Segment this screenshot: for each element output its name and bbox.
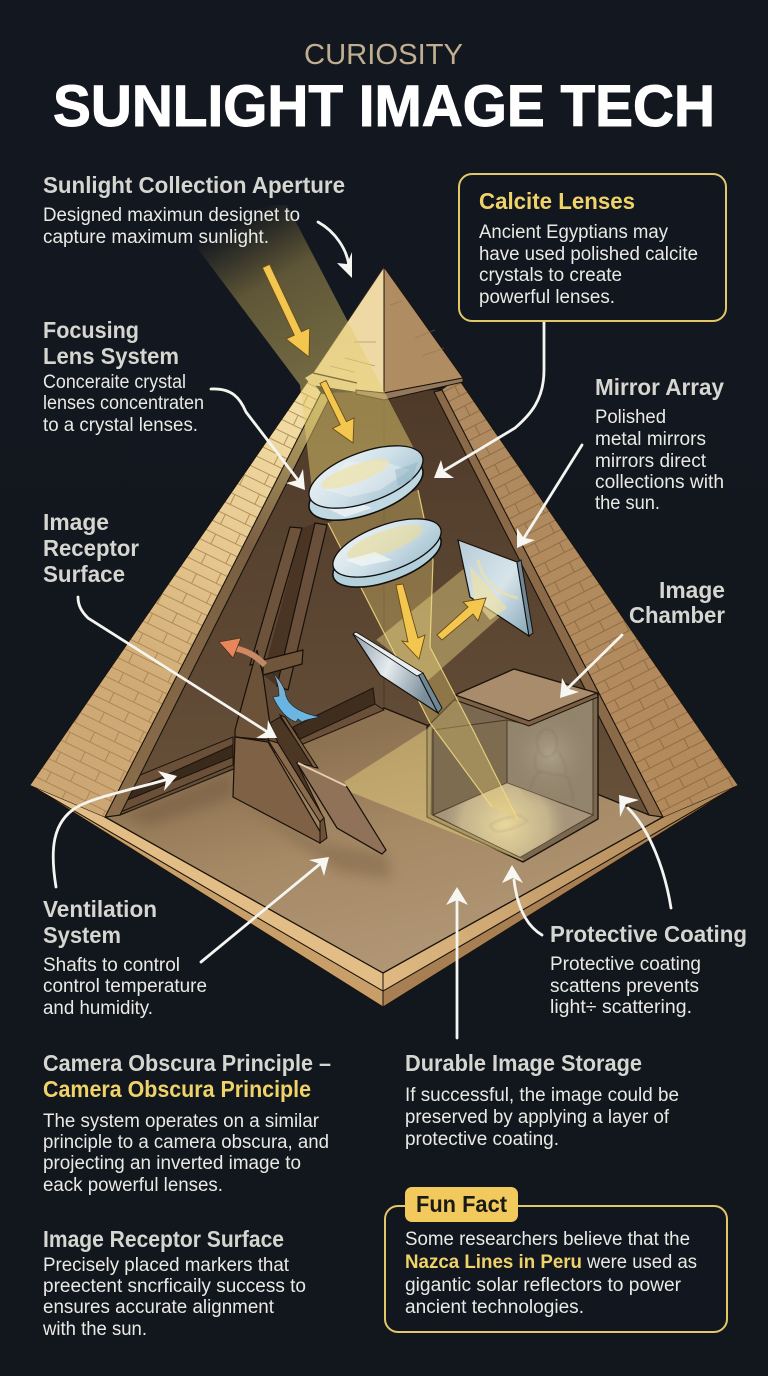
text block: image receptor surface: Image Receptor Surface [43, 1226, 284, 1252]
label: image receptor surface [43, 509, 139, 587]
label: protective coating: Protective coating [550, 954, 701, 975]
upper mirror [458, 540, 533, 636]
label: image receptor surface: Receptor [43, 535, 139, 561]
text block: durable image storage: If successful, the image could be [405, 1085, 679, 1106]
lens 2 [326, 507, 448, 599]
title: SUNLIGHT IMAGE TECH [53, 74, 715, 139]
label: protective coating: Protective Coating [550, 921, 747, 947]
label: protective coating: scattens prevents [550, 976, 699, 997]
label: ventilation system [43, 896, 207, 1019]
label: image receptor surface: Image [43, 509, 109, 535]
label: focusing lens system: Focusing [43, 317, 139, 343]
right wall [434, 378, 738, 817]
text block: camera obscura principle: The system operates on a similar [43, 1111, 320, 1132]
image chamber box [427, 669, 598, 862]
label: mirror array: Mirror Array [595, 374, 724, 400]
title [53, 39, 715, 139]
receptor board [297, 763, 386, 854]
label: ventilation system: control temperature [43, 976, 207, 997]
back wall [120, 390, 649, 815]
pyramid capstone [305, 267, 463, 400]
fun fact badge: Fun Fact [416, 1191, 507, 1217]
text block: durable image storage [405, 1050, 679, 1150]
text block: image receptor surface: with the sun. [42, 1319, 147, 1340]
label: focusing lens system: to a crystal lenses. [43, 415, 198, 436]
label: sunlight collection aperture: Designed maximun designet to [43, 205, 300, 226]
label: focusing lens system: Lens System [43, 343, 179, 369]
callout: calcite lenses: Calcite Lenses [479, 188, 635, 214]
callout: calcite lenses: have used polished calcite [479, 244, 698, 265]
label: protective coating [550, 921, 747, 1018]
label: ventilation system: and humidity. [43, 998, 153, 1019]
label: mirror array [595, 374, 724, 514]
label: focusing lens system [43, 317, 204, 436]
panel: fun fact: gigantic solar reflectors to power [405, 1275, 682, 1296]
label: mirror array: the sun. [595, 493, 660, 514]
label: mirror array: mirrors direct [595, 451, 707, 472]
label: ventilation system: Ventilation [43, 896, 157, 922]
panel: fun fact: Some researchers believe that the [405, 1229, 690, 1250]
label: focusing lens system: lenses concentraten [43, 393, 204, 414]
left wall [30, 378, 331, 817]
text block: durable image storage: protective coating. [405, 1129, 559, 1150]
lens 1 [301, 433, 431, 533]
panel: fun fact [385, 1187, 727, 1332]
light paths [328, 490, 523, 860]
label: image chamber: Image [659, 577, 725, 603]
image receptor stand [233, 523, 386, 854]
label: mirror array: collections with [595, 472, 724, 493]
text block: camera obscura principle: Camera Obscura Principle – [43, 1050, 331, 1076]
callout: calcite lenses: crystals to create [479, 265, 622, 286]
label: protective coating: light÷ scattering. [550, 997, 692, 1018]
label: sunlight collection aperture: Sunlight Collection Aperture [43, 172, 345, 198]
panel: fun fact: were used as [586, 1252, 697, 1273]
label: image receptor surface: Surface [43, 561, 125, 587]
callout: calcite lenses: Ancient Egyptians may [479, 222, 668, 243]
panel: fun fact: ancient technologies. [405, 1297, 584, 1318]
text block: durable image storage: preserved by applying a layer of [405, 1107, 670, 1128]
sunlight beam [165, 205, 420, 490]
ventilation shafts [120, 688, 384, 811]
text block: image receptor surface [42, 1226, 306, 1340]
callout: calcite lenses: powerful lenses. [479, 287, 615, 308]
label: focusing lens system: Concerаite crystal [43, 372, 186, 393]
panel: fun fact: Nazca Lines in Peru [405, 1252, 582, 1273]
pyramid illustration [30, 205, 738, 1007]
title: CURIOSITY [304, 39, 463, 71]
airflow arrows [219, 638, 320, 722]
label: sunlight collection aperture: capture maximum sunlight. [43, 227, 269, 248]
label: ventilation system: Shafts to control [43, 955, 180, 976]
label: mirror array: metal mirrors [595, 429, 706, 450]
text block: camera obscura principle [43, 1050, 331, 1196]
floor [105, 708, 663, 973]
text block: image receptor surface: Precisely placed markers that [43, 1255, 290, 1276]
label: image chamber: Chamber [629, 602, 725, 628]
label: ventilation system: System [43, 922, 121, 948]
label: image chamber [629, 577, 725, 628]
text block: camera obscura principle: principle to a camera obscura, and [43, 1132, 329, 1153]
lower mirror [353, 632, 442, 713]
text block: durable image storage: Durable Image Storage [405, 1050, 642, 1076]
projected portrait [490, 699, 588, 831]
slab base [30, 785, 738, 1007]
callout: calcite lenses [459, 174, 726, 321]
text block: camera obscura principle: projecting an inverted image to [43, 1153, 301, 1174]
fun fact badge [405, 1187, 518, 1222]
text block: image receptor surface: ensures accurate alignment [43, 1297, 275, 1318]
label: sunlight collection aperture [43, 172, 345, 248]
callout arrows [53, 222, 671, 1038]
text block: camera obscura principle: Camera Obscura Principle [43, 1076, 311, 1102]
text block: camera obscura principle: eack powerful lenses. [43, 1175, 223, 1196]
text block: image receptor surface: preectent sncrficaily success to [43, 1276, 306, 1297]
yellow light arrows [262, 264, 486, 659]
label: mirror array: Polished [595, 407, 666, 428]
